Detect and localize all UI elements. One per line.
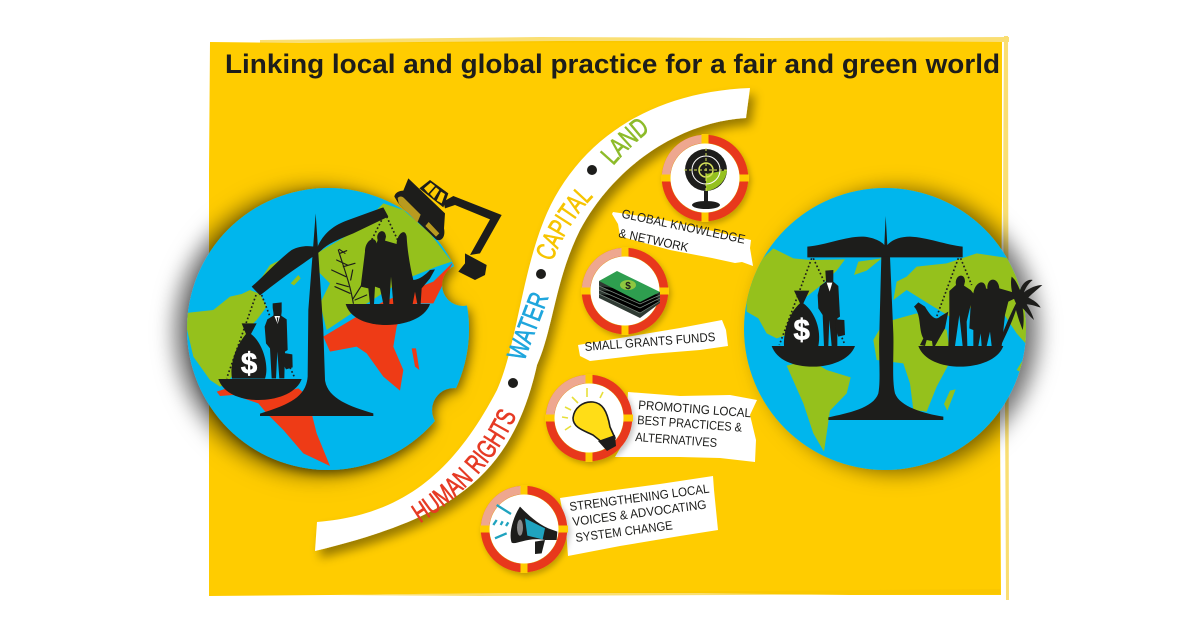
left pan <box>772 346 855 367</box>
ribbon word: land: LAND <box>600 119 647 166</box>
dollar sign: $ <box>794 314 810 347</box>
ribbon word: human rights: HUMAN RIGHTS <box>410 409 516 523</box>
ribbon word: capital: CAPITAL <box>536 188 594 259</box>
right globe: balanced scales <box>744 188 1033 470</box>
label band: global knowledge <box>612 207 753 266</box>
post and base <box>828 257 943 420</box>
label band: best practices: BEST PRACTICES & <box>637 413 743 435</box>
label band: small grants <box>578 320 728 361</box>
money bag <box>784 291 819 346</box>
label band: local voices: STRENGTHENING LOCAL <box>569 482 710 514</box>
three people and dog <box>361 231 435 304</box>
right pan <box>346 304 430 325</box>
icon: globe target <box>661 134 749 222</box>
left scales <box>218 178 502 416</box>
palm tree <box>997 277 1042 346</box>
icon: stack of money: $ <box>625 281 631 292</box>
label band: local voices: SYSTEM CHANGE <box>575 518 674 545</box>
dollar sign: $ <box>241 347 257 380</box>
ribbon dot <box>508 378 518 388</box>
right scales <box>772 216 1042 420</box>
tie <box>827 283 832 292</box>
label band: local voices <box>560 476 718 556</box>
label band: global knowledge: & NETWORK <box>617 226 690 255</box>
tilted beam <box>252 207 388 295</box>
icon: stack of money <box>581 247 669 335</box>
S-curve ribbon <box>315 88 750 551</box>
excavator <box>394 178 502 280</box>
dotted strings <box>227 217 400 378</box>
businessman <box>818 270 840 346</box>
label band: best practices: ALTERNATIVES <box>635 430 718 450</box>
ribbon word: water: WATER <box>506 292 549 358</box>
left pan <box>218 379 302 400</box>
ribbon dot <box>587 165 597 175</box>
icon: megaphone <box>480 485 568 573</box>
background panel <box>209 36 1009 600</box>
post and base <box>260 213 373 416</box>
title: Linking local and global practice for a fair and green world <box>225 49 1000 79</box>
label band: best practices: PROMOTING LOCAL <box>638 398 752 420</box>
dotted strings <box>779 258 972 345</box>
level beam <box>807 216 963 257</box>
plant <box>332 249 367 303</box>
briefcase <box>281 353 293 369</box>
tie <box>274 316 280 324</box>
ribbon dot <box>536 269 546 279</box>
label band: global knowledge: GLOBAL KNOWLEDGE <box>620 207 747 247</box>
label band: local voices: VOICES & ADVOCATING <box>572 497 707 529</box>
right pan <box>918 346 1003 367</box>
businessman <box>265 302 288 378</box>
label band: small grants: SMALL GRANTS FUNDS <box>584 330 716 354</box>
money bag <box>231 323 266 379</box>
briefcase <box>835 319 845 337</box>
family <box>948 276 1017 346</box>
label band: best practices <box>615 392 757 462</box>
chicken <box>914 302 948 346</box>
icon: light bulb <box>545 374 633 462</box>
left globe: unfair scales <box>183 188 469 470</box>
